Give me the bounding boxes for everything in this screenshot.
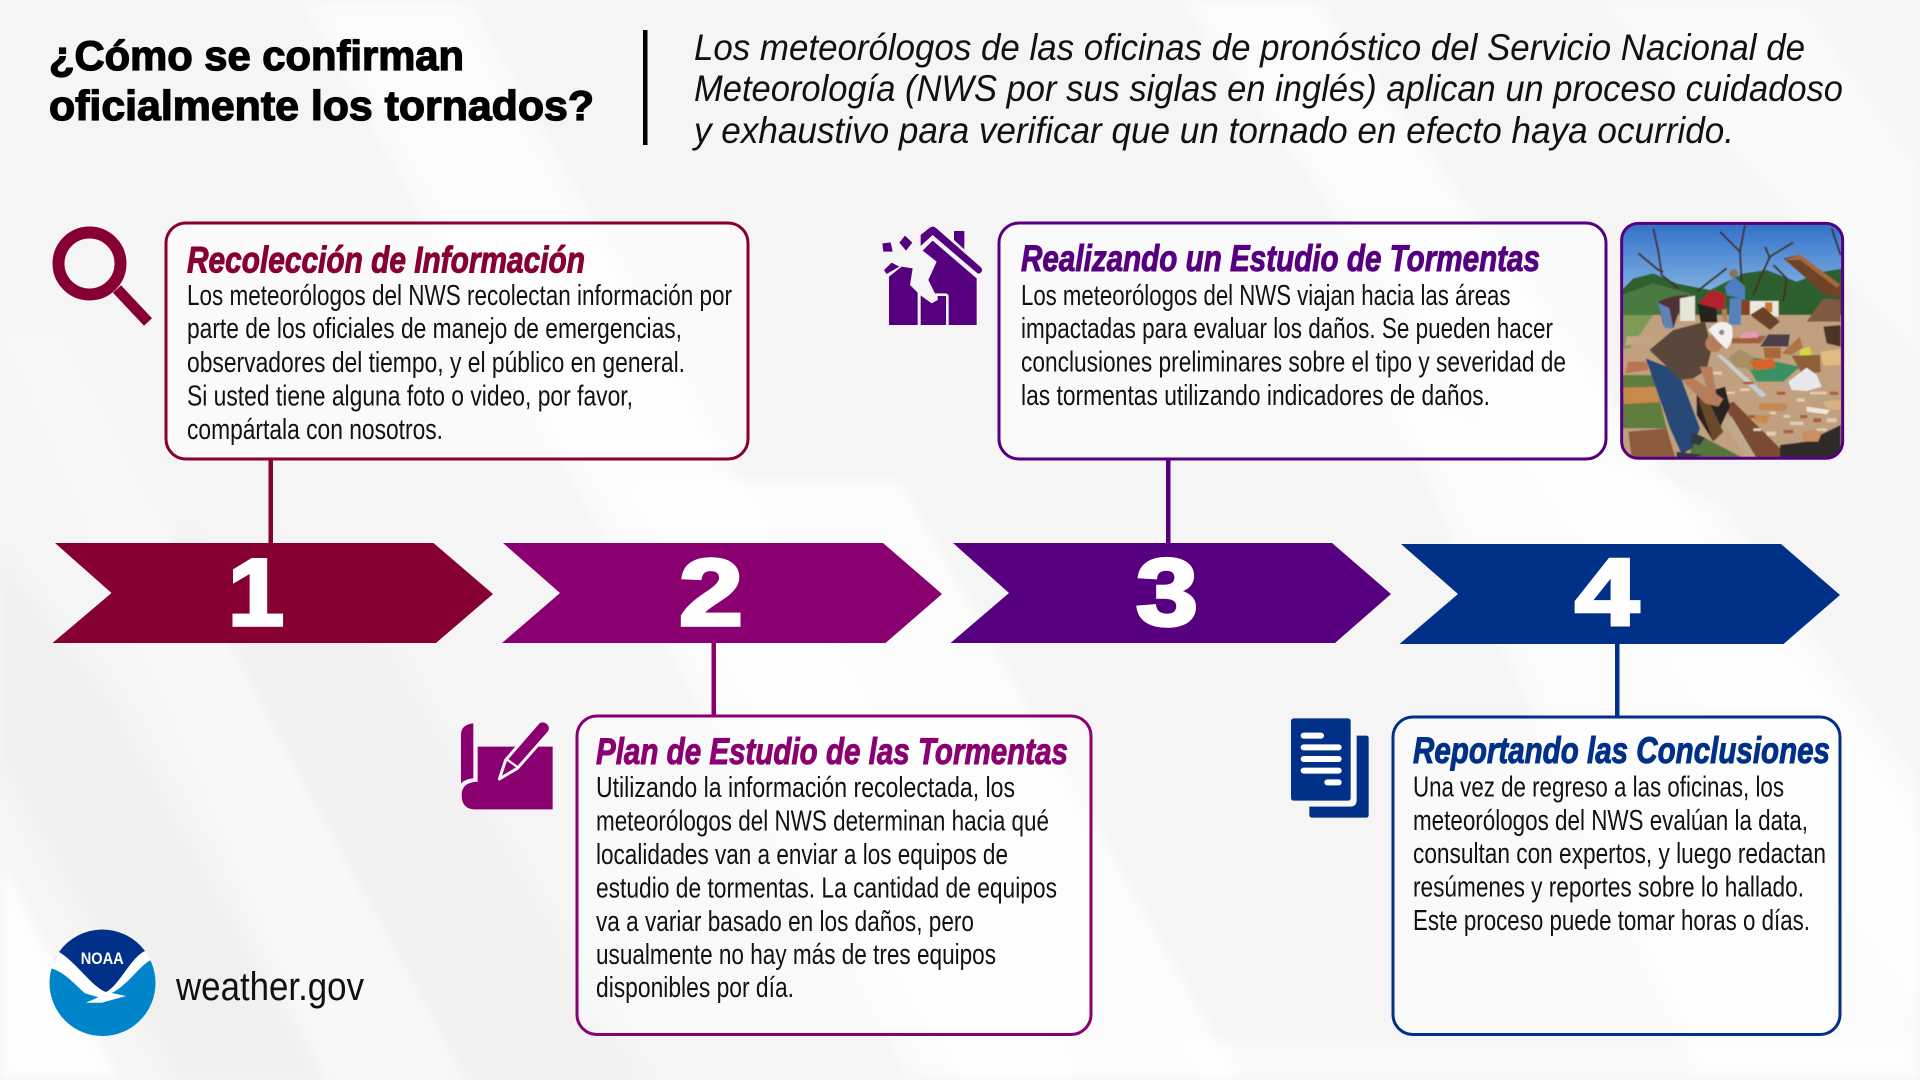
- icon: documents: [1291, 718, 1369, 818]
- arrow: step 4: [1400, 540, 1840, 646]
- number 3: 3: [1136, 540, 1198, 646]
- number 4: 4: [1575, 540, 1639, 646]
- body text: step 1: Si usted tiene alguna foto o video, por favor,: [187, 380, 633, 412]
- body text: step 4: Este proceso puede tomar horas o días.: [1413, 905, 1810, 937]
- icon: pen on paper plan: [461, 721, 553, 809]
- body text: step 4: meteorólogos del NWS evalúan la data,: [1413, 805, 1808, 837]
- connector: step 2: [712, 643, 716, 716]
- panel: step 4 reporting findings: [1393, 717, 1840, 1034]
- connector: step 4: [1615, 644, 1620, 716]
- connector: step 3: [1166, 459, 1170, 544]
- website label: weather.gov: [175, 965, 364, 1009]
- panel: step 3 storm survey: [999, 223, 1606, 459]
- number 1: 1: [228, 540, 284, 646]
- body text: step 2: usualmente no hay más de tres equipos: [596, 939, 996, 971]
- heading: step 1: Recolección de Información: [187, 240, 585, 280]
- intro text: [691, 27, 1843, 151]
- body text: step 1: observadores del tiempo, y el público en general.: [187, 347, 685, 379]
- body text: step 3: impactadas para evaluar los daños. Se pueden hacer: [1021, 313, 1553, 345]
- body text: step 4: [1413, 772, 1826, 937]
- title: oficialmente los tornados?: [49, 82, 594, 129]
- body text: step 1: [187, 280, 732, 446]
- panel: step 1 information gathering: [166, 223, 748, 459]
- icon: magnifying glass: [58, 232, 148, 322]
- photo: survey team among tornado debris: [1620, 222, 1847, 460]
- panel: step 2 survey plan: [577, 716, 1091, 1034]
- body text: step 4: Una vez de regreso a las oficinas, los: [1413, 772, 1784, 804]
- body text: step 3: Los meteorólogos del NWS viajan hacia las áreas: [1021, 280, 1510, 312]
- body text: step 2: va a variar basado en los daños, pero: [596, 906, 974, 938]
- body text: step 2: Utilizando la información recolectada, los: [596, 772, 1015, 804]
- body text: step 2: estudio de tormentas. La cantidad de equipos: [596, 872, 1057, 904]
- title: [49, 32, 594, 129]
- title: ¿Cómo se confirman: [49, 32, 464, 79]
- body text: step 2: [596, 772, 1057, 1004]
- body text: step 3: las tormentas utilizando indicadores de daños.: [1021, 380, 1490, 412]
- heading: step 4: Reportando las Conclusiones: [1413, 730, 1830, 771]
- body text: step 4: resúmenes y reportes sobre lo hallado.: [1413, 872, 1804, 904]
- heading: step 3: Realizando un Estudio de Tormentas: [1021, 238, 1540, 279]
- logo: NOAA: [50, 929, 156, 1036]
- icon: damaged house: [882, 227, 982, 325]
- heading: step 2: Plan de Estudio de las Tormentas: [596, 731, 1068, 772]
- body text: step 1: parte de los oficiales de manejo de emergencias,: [187, 313, 682, 345]
- arrow: step 3: [950, 540, 1391, 646]
- intro text: Los meteorólogos de las oficinas de pronóstico del Servicio Nacional de: [694, 27, 1805, 68]
- body text: step 1: Los meteorólogos del NWS recolectan información por: [187, 280, 732, 312]
- body text: step 2: disponibles por día.: [596, 972, 794, 1004]
- header divider: [643, 30, 648, 145]
- body text: step 2: meteorólogos del NWS determinan hacia qué: [596, 806, 1049, 838]
- logo: NOAA: NOAA: [81, 949, 124, 968]
- body text: step 3: [1021, 280, 1566, 412]
- arrow: step 2: [502, 540, 942, 646]
- body text: step 1: compártala con nosotros.: [187, 414, 443, 446]
- intro text: Meteorología (NWS por sus siglas en inglés) aplican un proceso cuidadoso: [694, 68, 1843, 109]
- arrow: step 1: [52, 540, 493, 646]
- body text: step 3: conclusiones preliminares sobre el tipo y severidad de: [1021, 346, 1566, 378]
- body text: step 2: localidades van a enviar a los equipos de: [596, 839, 1008, 871]
- connector: step 1: [268, 459, 273, 544]
- number 2: 2: [679, 540, 743, 646]
- intro text: y exhaustivo para verificar que un tornado en efecto haya ocurrido.: [691, 110, 1734, 151]
